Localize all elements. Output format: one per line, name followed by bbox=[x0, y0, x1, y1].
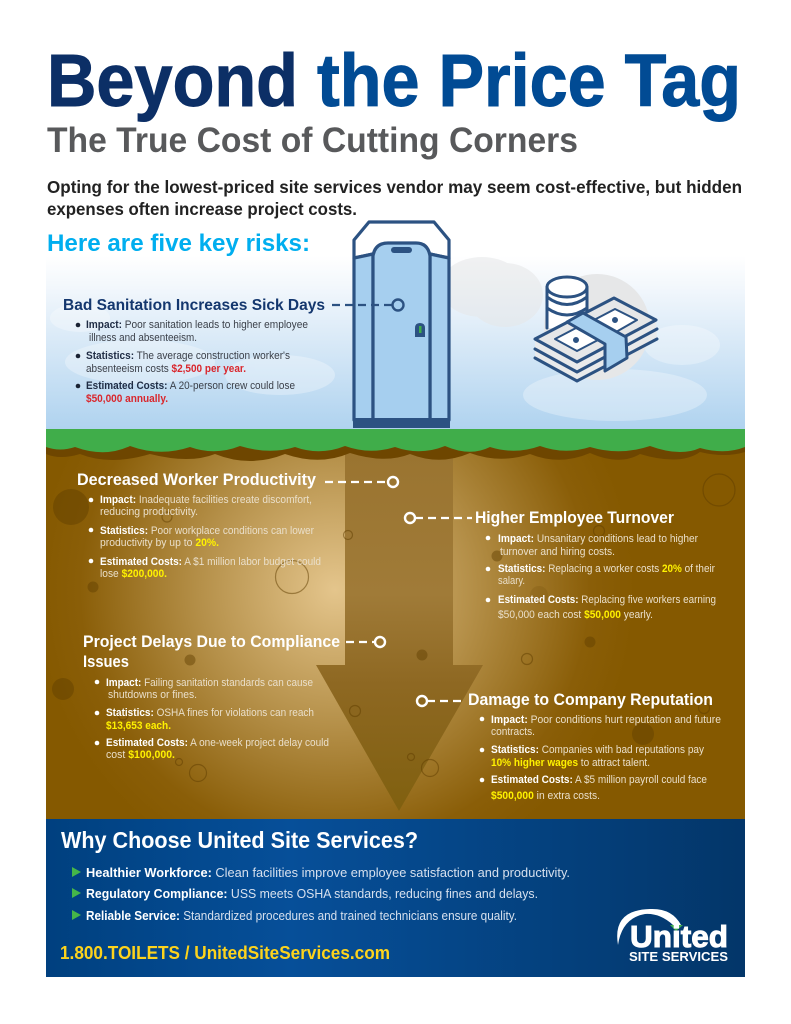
heading: reputation: Damage to Company Reputation bbox=[468, 691, 713, 709]
bullets: reputation: Statistics: Companies with bad reputations pay bbox=[491, 744, 705, 756]
bullets: productivity: Statistics: Poor workplace conditions can lower bbox=[100, 525, 314, 537]
bullets: reputation: contracts. bbox=[491, 726, 535, 738]
bullets: turnover: turnover and hiring costs. bbox=[500, 546, 615, 558]
bullets: turnover: Estimated Costs: Replacing five workers earning bbox=[498, 594, 716, 606]
panel: why choose united bbox=[46, 819, 745, 977]
benefits list: Reliable Service: Standardized procedures and trained technicians ensure quality. bbox=[86, 908, 517, 923]
section: worker productivity bbox=[77, 471, 398, 580]
section: employee turnover bbox=[405, 509, 716, 621]
bullets: turnover bbox=[486, 533, 716, 621]
connector: sanitation bbox=[332, 300, 404, 310]
bullets: turnover: $50,000 each cost $50,000 yearly. bbox=[498, 609, 653, 621]
logo: united site services: SITE SERVICES bbox=[629, 950, 728, 964]
grass bbox=[46, 429, 745, 452]
bullets: reputation: Impact: Poor conditions hurt reputation and future bbox=[491, 714, 721, 726]
title bbox=[47, 39, 741, 122]
intro text bbox=[47, 177, 742, 219]
heading: why choose: Why Choose United Site Services? bbox=[61, 827, 418, 853]
bullets: sanitation: absenteeism costs $2,500 per year. bbox=[86, 363, 246, 375]
connector: turnover bbox=[405, 513, 472, 523]
heading: project delays: Project Delays Due to Compliance bbox=[83, 633, 340, 651]
heading: project delays: Issues bbox=[83, 653, 129, 671]
benefits list: Regulatory Compliance: USS meets OSHA standards, reducing fines and delays. bbox=[86, 886, 538, 901]
soil texture bbox=[52, 489, 654, 745]
connector: project delays bbox=[346, 637, 385, 647]
bullets: project delays: Estimated Costs: A one-week project delay could bbox=[106, 737, 329, 749]
intro text: Opting for the lowest-priced site services vendor may seem cost-effective, but hidden bbox=[47, 177, 742, 197]
bullets: sanitation: Impact: Poor sanitation leads to higher employee bbox=[86, 319, 308, 331]
logo: united site services: United bbox=[630, 919, 728, 954]
bullets: sanitation: illness and absenteeism. bbox=[89, 332, 197, 344]
intro text: expenses often increase project costs. bbox=[47, 199, 357, 219]
logo: united site services bbox=[617, 909, 728, 964]
bullets: sanitation: Statistics: The average construction worker's bbox=[86, 350, 291, 362]
bullets: reputation bbox=[480, 714, 721, 802]
benefits list: Healthier Workforce: Clean facilities improve employee satisfaction and productivity. bbox=[86, 865, 570, 880]
bullets: productivity bbox=[89, 494, 321, 580]
section: project delays bbox=[83, 633, 385, 761]
bullets: productivity: lose $200,000. bbox=[100, 568, 167, 580]
section: company reputation bbox=[417, 691, 721, 802]
icon: money and coins bbox=[535, 274, 657, 381]
panel: sky bbox=[46, 256, 745, 432]
bullets: project delays: cost $100,000. bbox=[106, 749, 175, 761]
panel: soil bbox=[46, 440, 745, 819]
connector: productivity bbox=[325, 477, 398, 487]
section: bad sanitation bbox=[63, 297, 404, 405]
bullets: sanitation bbox=[76, 319, 308, 405]
bullets: turnover: Statistics: Replacing a worker costs 20% of their bbox=[498, 563, 715, 575]
bullets: project delays: Statistics: OSHA fines for violations can reach bbox=[106, 707, 314, 719]
grass shadow bbox=[46, 446, 745, 461]
bullets: sanitation: Estimated Costs: A 20-person crew could lose bbox=[86, 380, 295, 392]
title: the Price Tag bbox=[317, 39, 741, 122]
bullets: productivity: Estimated Costs: A $1 million labor budget could bbox=[100, 556, 321, 568]
bullets: project delays bbox=[95, 677, 329, 761]
icon: portable toilet bbox=[353, 222, 450, 428]
heading: five key risks: Here are five key risks: bbox=[47, 230, 310, 257]
bullets: sanitation: $50,000 annually. bbox=[86, 393, 168, 405]
bullets: project delays: shutdowns or fines. bbox=[108, 689, 197, 701]
bullets: reputation: 10% higher wages to attract talent. bbox=[491, 757, 650, 769]
subtitle: The True Cost of Cutting Corners bbox=[47, 121, 578, 160]
contact line: 1.800.TOILETS / UnitedSiteServices.com bbox=[60, 943, 390, 963]
heading: turnover: Higher Employee Turnover bbox=[475, 509, 675, 527]
connector: reputation bbox=[417, 696, 462, 706]
heading: productivity: Decreased Worker Productivity bbox=[77, 471, 317, 489]
bullets: productivity: productivity by up to 20%. bbox=[100, 537, 219, 549]
title: Beyond bbox=[47, 39, 298, 122]
heading: sanitation: Bad Sanitation Increases Sick Days bbox=[63, 297, 325, 314]
bullets: project delays: $13,653 each. bbox=[106, 720, 171, 732]
heading: project delays bbox=[83, 633, 340, 671]
bullets: turnover: salary. bbox=[498, 575, 525, 587]
downward arrow bbox=[316, 450, 483, 811]
bullets: productivity: reducing productivity. bbox=[100, 506, 198, 518]
bullets: reputation: Estimated Costs: A $5 million payroll could face bbox=[491, 774, 707, 786]
bullets: project delays: Impact: Failing sanitation standards can cause bbox=[106, 677, 313, 689]
bullets: productivity: Impact: Inadequate facilities create discomfort, bbox=[100, 494, 312, 506]
bullets: turnover: Impact: Unsanitary conditions lead to higher bbox=[498, 533, 698, 545]
benefits list bbox=[72, 865, 570, 923]
bullets: reputation: $500,000 in extra costs. bbox=[491, 790, 600, 802]
